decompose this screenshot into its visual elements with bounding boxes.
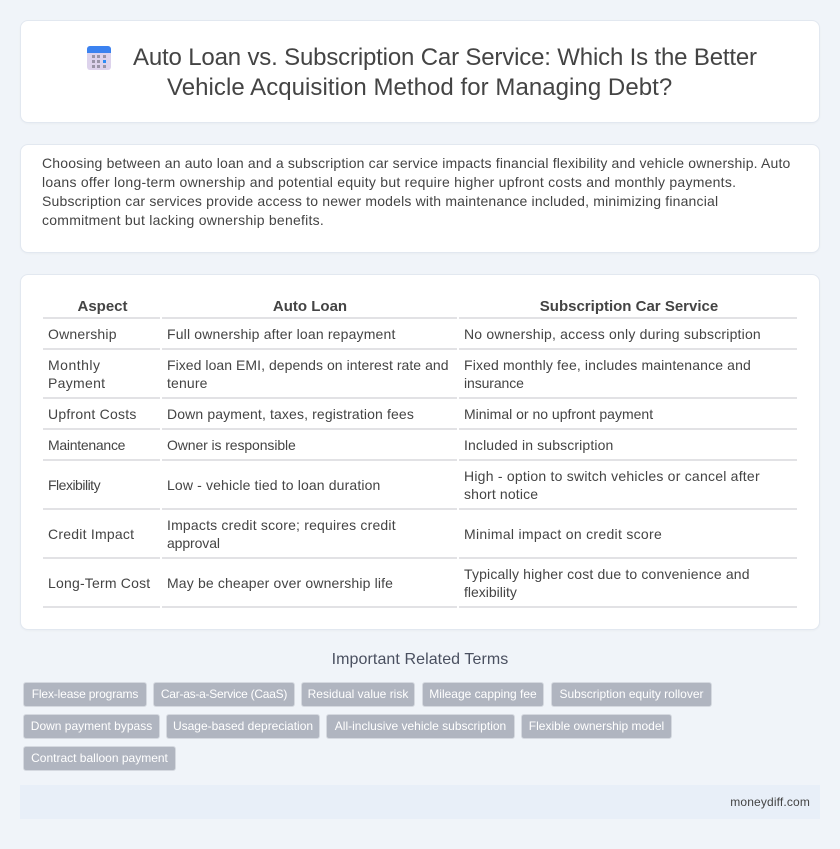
row: ownership: Full ownership after loan repayment bbox=[167, 326, 396, 342]
row: upfront costs: Upfront Costs bbox=[48, 406, 137, 422]
row: monthly payment: Payment bbox=[48, 375, 105, 391]
row: credit impact: Impacts credit score; requires credit bbox=[167, 517, 396, 533]
row: monthly payment: tenure bbox=[167, 375, 208, 391]
related term tags: Car-as-a-Service (CaaS) bbox=[161, 687, 287, 701]
row: flexibility: High - option to switch vehicles or cancel after bbox=[464, 468, 760, 484]
row: ownership bbox=[48, 326, 761, 342]
row: upfront costs bbox=[48, 406, 654, 422]
related term tags: Subscription equity rollover bbox=[559, 687, 704, 701]
title: Auto Loan vs. Subscription Car Service: Which Is the Better bbox=[133, 44, 757, 71]
title: Vehicle Acquisition Method for Managing Debt? bbox=[167, 74, 672, 101]
text block: introduction: Subscription car services provide access to newer models with maintenance included, minimizing financial bbox=[42, 193, 718, 209]
row: monthly payment: insurance bbox=[464, 375, 524, 391]
text block: introduction: commitment but lacking ownership benefits. bbox=[42, 212, 324, 228]
row: upfront costs: Minimal or no upfront payment bbox=[464, 406, 653, 422]
row: flexibility: short notice bbox=[464, 486, 538, 502]
row: long-term cost: Typically higher cost due to convenience and bbox=[464, 566, 750, 582]
row: long-term cost: flexibility bbox=[464, 584, 517, 600]
row: upfront costs: Down payment, taxes, registration fees bbox=[167, 406, 414, 422]
related term tags: Mileage capping fee bbox=[429, 687, 537, 701]
related term tags bbox=[23, 682, 712, 771]
table header: Auto Loan bbox=[273, 298, 347, 315]
panel: introduction bbox=[20, 144, 820, 253]
row: flexibility: Flexibility bbox=[48, 477, 100, 493]
row: long-term cost bbox=[48, 566, 750, 600]
table header: Aspect bbox=[77, 298, 128, 315]
text block: introduction: loans offer long-term ownership and potential equity but require higher upfront costs and monthly payments. bbox=[42, 174, 736, 190]
row: credit impact: Credit Impact bbox=[48, 526, 134, 542]
related term tags: Down payment bypass bbox=[31, 719, 152, 733]
row: flexibility bbox=[48, 468, 760, 502]
row: monthly payment: Monthly bbox=[48, 357, 101, 373]
related term tags: Flexible ownership model bbox=[529, 719, 664, 733]
row: credit impact: Minimal impact on credit score bbox=[464, 526, 662, 542]
related term tags: Usage-based depreciation bbox=[173, 719, 313, 733]
row: monthly payment: Fixed monthly fee, includes maintenance and bbox=[464, 357, 751, 373]
footer source text: moneydiff.com bbox=[730, 795, 810, 809]
row: monthly payment: Fixed loan EMI, depends on interest rate and bbox=[167, 357, 449, 373]
footer bbox=[20, 785, 820, 819]
row: credit impact bbox=[48, 517, 662, 551]
text block: introduction: Choosing between an auto loan and a subscription car service impacts financial flexibility and vehicle ownership. Auto bbox=[42, 155, 790, 171]
row: maintenance: Maintenance bbox=[48, 437, 125, 453]
related term tags: Contract balloon payment bbox=[31, 751, 168, 765]
row: maintenance: Included in subscription bbox=[464, 437, 613, 453]
table header bbox=[77, 298, 718, 315]
panel: header bbox=[20, 20, 820, 123]
row: ownership: Ownership bbox=[48, 326, 117, 342]
row: ownership: No ownership, access only during subscription bbox=[464, 326, 761, 342]
related term tags: Flex-lease programs bbox=[32, 687, 138, 701]
related term tags: All-inclusive vehicle subscription bbox=[335, 719, 506, 733]
table header: Subscription Car Service bbox=[540, 298, 718, 315]
row: maintenance: Owner is responsible bbox=[167, 437, 296, 453]
text block: introduction bbox=[42, 155, 790, 228]
panel: comparison table bbox=[20, 274, 820, 630]
heading: important related terms: Important Related Terms bbox=[332, 651, 508, 668]
icon: calendar bbox=[87, 46, 111, 70]
row: credit impact: approval bbox=[167, 535, 220, 551]
row: flexibility: Low - vehicle tied to loan duration bbox=[167, 477, 380, 493]
row: monthly payment bbox=[48, 357, 751, 391]
title bbox=[133, 44, 757, 101]
row: long-term cost: Long-Term Cost bbox=[48, 575, 150, 591]
row: long-term cost: May be cheaper over ownership life bbox=[167, 575, 393, 591]
row: maintenance bbox=[48, 437, 613, 453]
related term tags: Residual value risk bbox=[308, 687, 408, 701]
